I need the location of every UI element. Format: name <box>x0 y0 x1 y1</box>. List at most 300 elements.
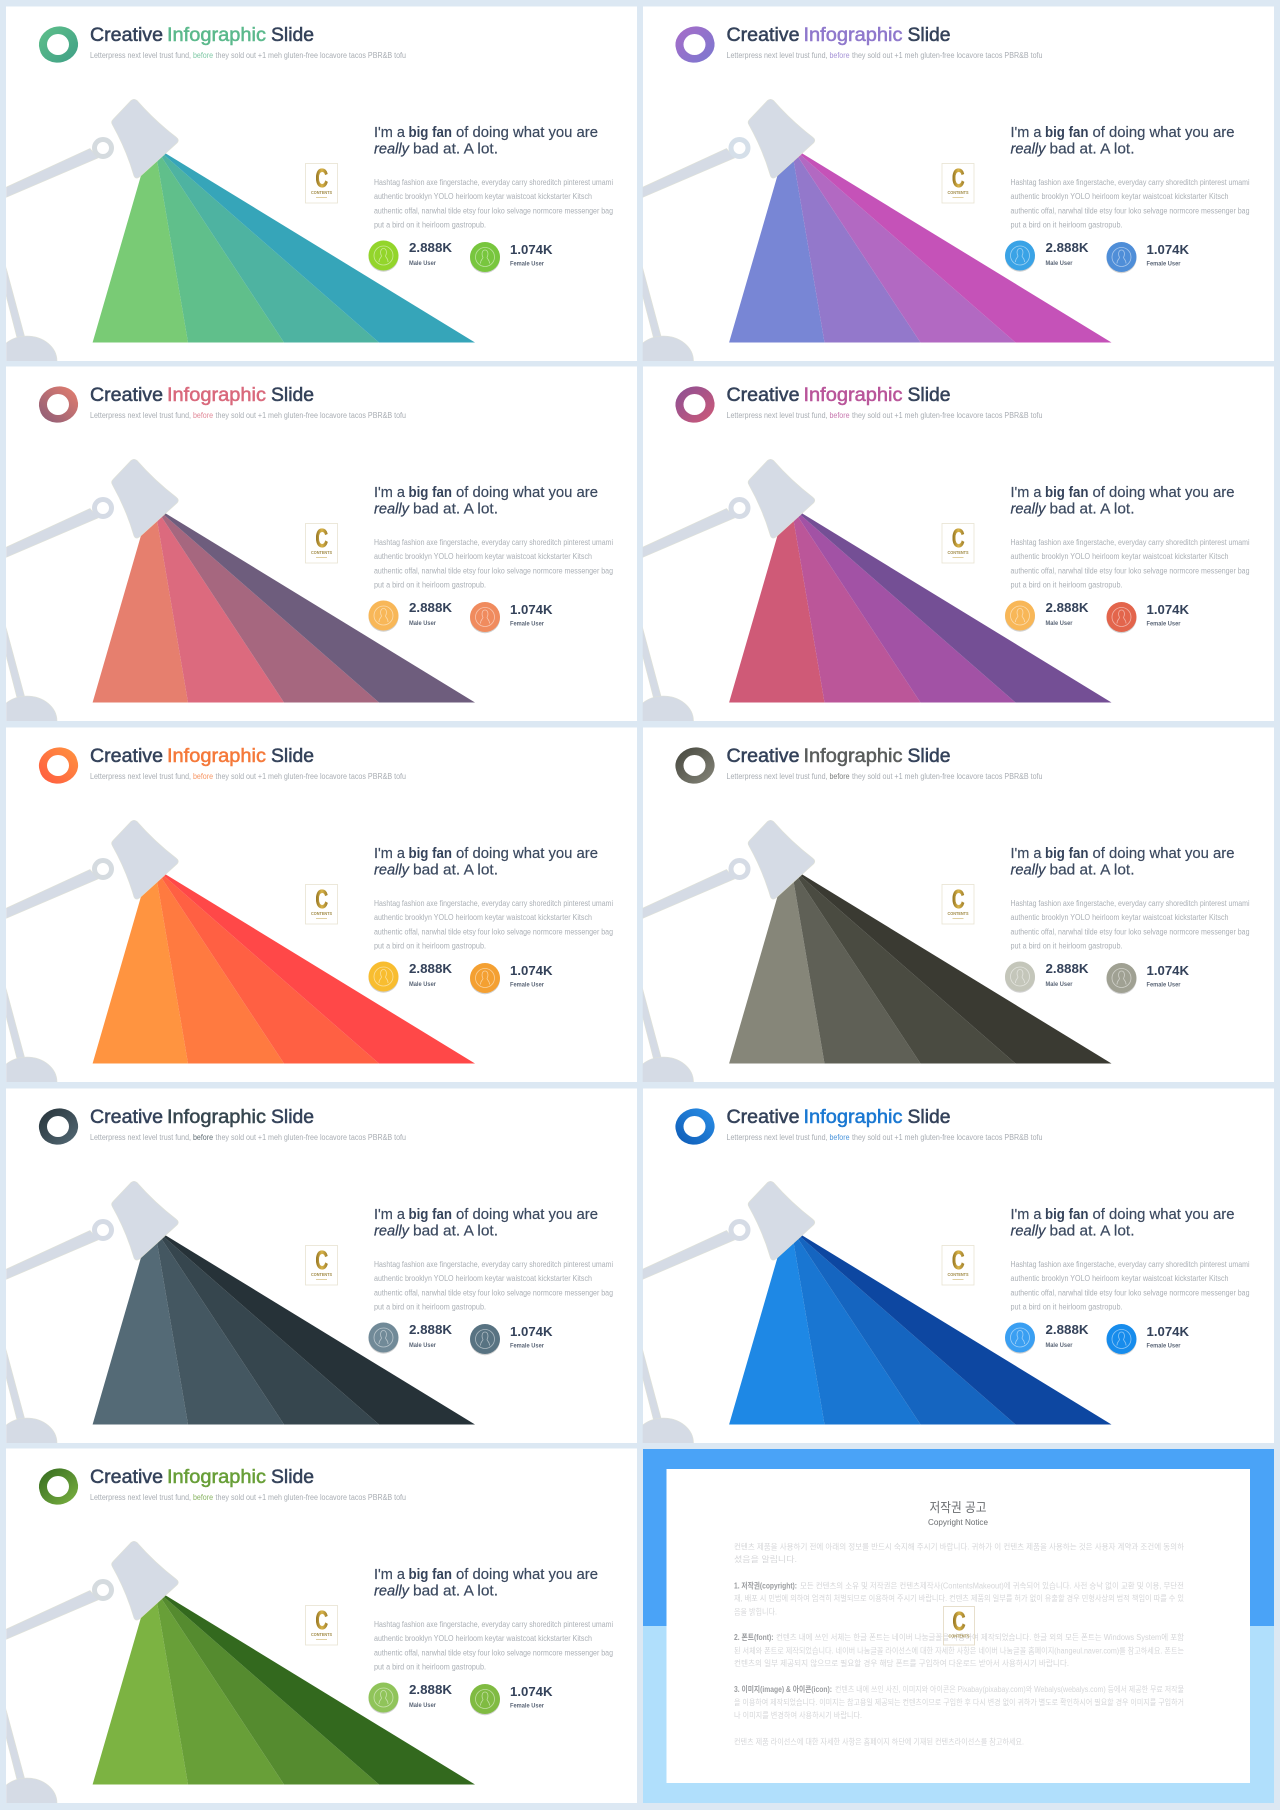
panel: grey slide <box>634 728 1274 1107</box>
stat: male user: 2.888K <box>1046 1323 1088 1337</box>
heading: I'm a <box>1010 484 1042 501</box>
body text: authentic offal, narwhal tilde etsy four loko selvage normcore messenger bag <box>1010 1288 1250 1298</box>
icon: desk lamp <box>6 99 178 361</box>
stat: male user: Male User <box>409 620 436 627</box>
stat: male user <box>1005 240 1088 272</box>
title: Infographic <box>167 746 266 767</box>
body text: Hashtag fashion axe fingerstache, everyday carry shoreditch pinterest umami <box>1010 538 1250 547</box>
subtitle <box>726 1133 1042 1142</box>
stat: female user <box>1106 242 1189 273</box>
title <box>90 1107 314 1128</box>
logo: C <box>316 1245 328 1275</box>
title: Infographic <box>167 1107 266 1128</box>
heading: really <box>374 140 410 158</box>
heading: I'm a <box>374 124 406 141</box>
panel: slate slide <box>0 1088 637 1468</box>
body text: put a bird on it heirloom gastropub. <box>374 942 486 950</box>
heading: big fan <box>408 484 452 501</box>
subtitle: before <box>830 1133 850 1142</box>
body text: authentic offal, narwhal tilde etsy four loko selvage normcore messenger bag <box>374 566 613 576</box>
heading: bad at. A lot. <box>1050 862 1134 878</box>
body text: authentic brooklyn YOLO heirloom keytar waistcoat kickstarter Kitsch <box>1010 552 1228 561</box>
title: Creative <box>90 1107 163 1128</box>
title <box>90 385 314 406</box>
title: Slide <box>908 385 950 406</box>
body text <box>374 538 613 590</box>
subtitle: before <box>193 51 213 60</box>
body text: Hashtag fashion axe fingerstache, everyday carry shoreditch pinterest umami <box>1010 1260 1250 1269</box>
title: Slide <box>271 385 314 406</box>
heading: big fan <box>408 845 452 862</box>
stat: female user: 1.074K <box>510 1685 552 1699</box>
logo: C <box>952 1606 966 1636</box>
stat: male user: Male User <box>1046 620 1073 627</box>
subtitle: they sold out +1 meh gluten-free locavore tacos PBR&B tofu <box>852 411 1042 420</box>
title: Infographic <box>167 385 266 406</box>
body text: authentic brooklyn YOLO heirloom keytar waistcoat kickstarter Kitsch <box>374 192 592 201</box>
heading: big fan <box>1045 484 1088 501</box>
subtitle: they sold out +1 meh gluten-free locavore tacos PBR&B tofu <box>216 1493 406 1502</box>
stat: male user <box>368 1322 452 1354</box>
logo: CONTENTS <box>311 1272 332 1277</box>
stat: male user: Male User <box>409 981 436 988</box>
icon: ring logo <box>39 1108 78 1145</box>
title <box>90 746 314 767</box>
stat: female user: Female User <box>510 982 544 988</box>
heading <box>374 1206 598 1240</box>
stat: male user: 2.888K <box>409 1683 452 1697</box>
body text <box>374 1260 613 1312</box>
copyright body text: 을 이용하여 제작되었습니다. 이미지는 참고용일 제공되는 컨텐츠이므로 구입한 후 다시 변경 없이 귀하가 별도로 확인하시어 필요할 경우 이미지를 구입하거 <box>734 1697 1184 1707</box>
title <box>90 1467 314 1488</box>
heading: of doing what you are <box>456 484 598 501</box>
icon: ring logo <box>675 1108 715 1145</box>
icon: desk lamp <box>0 1541 178 1810</box>
logo <box>942 1245 974 1285</box>
body text <box>374 178 613 230</box>
copyright title: Copyright Notice <box>928 1517 988 1527</box>
subtitle: they sold out +1 meh gluten-free locavore tacos PBR&B tofu <box>852 51 1042 60</box>
title: Creative <box>726 746 800 767</box>
stat: female user: Female User <box>1146 982 1181 988</box>
icon: desk lamp <box>6 820 178 1082</box>
icon: ring logo <box>675 26 715 63</box>
body text: authentic brooklyn YOLO heirloom keytar waistcoat kickstarter Kitsch <box>374 1274 592 1283</box>
heading: I'm a <box>374 1206 406 1223</box>
heading <box>1010 124 1234 158</box>
subtitle: before <box>193 1493 213 1502</box>
stat: male user: 2.888K <box>409 241 452 255</box>
light beam chart <box>729 874 1112 1064</box>
stat: male user <box>1005 962 1088 993</box>
title: Infographic <box>804 1107 902 1128</box>
logo: C <box>316 163 328 193</box>
logo: CONTENTS <box>311 911 332 916</box>
heading: bad at. A lot. <box>413 862 498 878</box>
body text: authentic offal, narwhal tilde etsy four loko selvage normcore messenger bag <box>374 206 613 216</box>
title: Creative <box>90 25 163 46</box>
body text: authentic offal, narwhal tilde etsy four loko selvage normcore messenger bag <box>374 928 613 936</box>
body text: Hashtag fashion axe fingerstache, everyday carry shoreditch pinterest umami <box>1010 899 1250 908</box>
subtitle: before <box>193 411 213 420</box>
stat: female user <box>1106 602 1189 633</box>
logo: C <box>316 884 328 914</box>
icon: desk lamp <box>6 459 178 721</box>
title: Creative <box>726 25 800 46</box>
title: Creative <box>90 385 163 406</box>
subtitle: Letterpress next level trust fund, <box>726 51 828 60</box>
logo <box>942 523 974 563</box>
stat: female user: 1.074K <box>1146 243 1189 257</box>
copyright body text: 컨텐츠 내에 쓰인 사진, 이미지와 아이콘은 Pixabay(pixabay.com)와 Webalys(webalys.com) 등에서 제공한 무료 저작물 <box>835 1684 1184 1694</box>
subtitle: Letterpress next level trust fund, <box>90 1493 191 1502</box>
heading: big fan <box>408 124 452 141</box>
title: Infographic <box>804 385 902 406</box>
subtitle <box>90 772 406 781</box>
light beam chart <box>93 1235 475 1424</box>
logo <box>306 163 338 203</box>
stat: female user: Female User <box>510 1342 544 1350</box>
logo <box>306 523 338 563</box>
copyright body text: 3. 이미지(image) & 아이콘(icon): <box>734 1684 832 1694</box>
title: Slide <box>271 746 314 767</box>
copyright body text <box>734 1542 1185 1746</box>
heading: I'm a <box>1010 845 1042 862</box>
subtitle: they sold out +1 meh gluten-free locavore tacos PBR&B tofu <box>216 1133 406 1142</box>
subtitle: they sold out +1 meh gluten-free locavore tacos PBR&B tofu <box>852 1133 1042 1142</box>
stat: female user: Female User <box>1146 1342 1181 1350</box>
heading <box>1010 484 1234 518</box>
logo <box>306 884 338 924</box>
stat: male user: Male User <box>409 1702 436 1709</box>
subtitle <box>726 411 1042 420</box>
title <box>726 25 950 46</box>
title: Slide <box>271 1107 314 1128</box>
stat: female user <box>1106 1324 1189 1355</box>
light beam chart <box>729 513 1112 702</box>
body text: put a bird on it heirloom gastropub. <box>374 1662 486 1672</box>
subtitle <box>90 51 406 60</box>
heading: really <box>1010 140 1047 158</box>
stat: female user: Female User <box>1146 620 1181 628</box>
stat: male user: 2.888K <box>1046 241 1088 255</box>
heading: of doing what you are <box>456 124 598 141</box>
body text: authentic brooklyn YOLO heirloom keytar waistcoat kickstarter Kitsch <box>1010 1274 1228 1283</box>
heading: big fan <box>1045 124 1088 141</box>
copyright body text: 음을 밝힙니다. <box>734 1606 777 1616</box>
stat: female user: 1.074K <box>1146 603 1189 617</box>
body text: put a bird on it heirloom gastropub. <box>1010 580 1122 590</box>
stat: female user: 1.074K <box>510 603 552 617</box>
stat: female user: 1.074K <box>1146 1325 1189 1339</box>
heading: bad at. A lot. <box>1050 500 1134 518</box>
logo: C <box>316 523 328 553</box>
title <box>726 746 950 767</box>
subtitle <box>726 772 1042 781</box>
stat: male user <box>368 1682 452 1714</box>
stat: female user: 1.074K <box>1146 964 1189 978</box>
stat: male user: 2.888K <box>1046 601 1088 615</box>
copyright title: 저작권 공고 <box>930 1500 987 1515</box>
heading: bad at. A lot. <box>413 1222 498 1240</box>
copyright title <box>928 1500 988 1527</box>
icon: desk lamp <box>642 820 815 1082</box>
stat: female user: Female User <box>510 620 544 628</box>
icon: desk lamp <box>642 99 815 361</box>
heading: big fan <box>408 1566 452 1583</box>
panel: purple slide <box>634 6 1274 386</box>
body text: authentic offal, narwhal tilde etsy four loko selvage normcore messenger bag <box>1010 566 1250 576</box>
title: Slide <box>271 1467 314 1488</box>
copyright body text: 된 서체와 폰트로 제작되었습니다. 네이버 나눔글꼴 라이선스에 대한 자세한 사항은 네이버 나눔글꼴 홈페이지(hangeul.naver.com)를 참고하세요. 폰트는 <box>734 1646 1184 1656</box>
heading <box>1010 1206 1234 1240</box>
heading <box>374 845 598 878</box>
stat: male user <box>368 240 452 272</box>
panel: copyright notice <box>643 1449 1274 1803</box>
stat: male user: Male User <box>1046 1342 1073 1349</box>
light beam chart <box>93 1595 475 1784</box>
panel: green slide <box>0 6 637 386</box>
heading: I'm a <box>374 484 406 501</box>
light beam chart <box>93 874 475 1064</box>
logo <box>942 163 974 203</box>
light beam chart <box>729 1235 1112 1424</box>
heading: bad at. A lot. <box>413 140 498 158</box>
subtitle: Letterpress next level trust fund, <box>726 772 828 781</box>
body text: Hashtag fashion axe fingerstache, everyday carry shoreditch pinterest umami <box>374 1620 613 1629</box>
stat: male user: 2.888K <box>409 962 452 976</box>
subtitle: Letterpress next level trust fund, <box>90 411 191 420</box>
body text: authentic brooklyn YOLO heirloom keytar waistcoat kickstarter Kitsch <box>1010 913 1228 922</box>
light beam chart <box>93 513 475 702</box>
body text: authentic offal, narwhal tilde etsy four loko selvage normcore messenger bag <box>1010 206 1250 216</box>
subtitle <box>726 51 1042 60</box>
copyright body text: 컨텐츠 제품을 사용하기 전에 아래의 정보를 반드시 숙지해 주시기 바랍니다. 귀하가 이 컨텐츠 제품을 사용하는 것은 사용자 계약과 조건에 동의하 <box>734 1542 1185 1552</box>
subtitle: Letterpress next level trust fund, <box>90 772 191 781</box>
stat: female user: Female User <box>510 260 544 268</box>
stat: male user: Male User <box>409 260 436 267</box>
stat: male user <box>1005 600 1088 632</box>
logo: CONTENTS <box>948 1272 968 1277</box>
body text <box>1010 899 1250 950</box>
icon: ring logo <box>39 26 78 63</box>
logo <box>944 1606 974 1645</box>
stat: female user: Female User <box>1146 260 1181 268</box>
logo: C <box>952 163 965 193</box>
copyright body text: 2. 폰트(font): <box>734 1633 774 1642</box>
subtitle <box>90 411 406 420</box>
heading: of doing what you are <box>456 1206 598 1223</box>
stat: male user: 2.888K <box>1046 962 1088 976</box>
stat: male user: Male User <box>409 1342 436 1349</box>
logo: CONTENTS <box>948 550 968 555</box>
heading: big fan <box>1045 1206 1088 1223</box>
heading: really <box>374 1222 410 1240</box>
body text: put a bird on it heirloom gastropub. <box>374 580 486 590</box>
icon: desk lamp <box>642 1181 815 1443</box>
title: Infographic <box>167 25 266 46</box>
title: Slide <box>271 25 314 46</box>
logo: CONTENTS <box>311 1632 332 1637</box>
heading <box>374 124 598 158</box>
stat: female user: 1.074K <box>510 243 552 257</box>
heading <box>374 1566 598 1600</box>
title: Creative <box>726 1107 800 1128</box>
logo: C <box>952 884 965 914</box>
body text: Hashtag fashion axe fingerstache, everyday carry shoreditch pinterest umami <box>1010 178 1250 187</box>
subtitle: before <box>830 51 850 60</box>
logo: C <box>952 523 965 553</box>
heading: of doing what you are <box>1092 124 1234 141</box>
title: Slide <box>908 1107 950 1128</box>
heading: of doing what you are <box>1092 1206 1234 1223</box>
icon: desk lamp <box>642 459 815 721</box>
logo: C <box>952 1245 965 1275</box>
logo <box>942 884 974 924</box>
body text: Hashtag fashion axe fingerstache, everyday carry shoreditch pinterest umami <box>374 178 613 187</box>
stat: female user <box>470 602 552 633</box>
stat: female user <box>470 1324 552 1355</box>
stat: male user <box>368 600 452 632</box>
body text: authentic brooklyn YOLO heirloom keytar waistcoat kickstarter Kitsch <box>374 913 592 922</box>
body text <box>1010 178 1250 230</box>
logo <box>306 1245 338 1285</box>
stat: female user: 1.074K <box>510 964 552 978</box>
body text: authentic brooklyn YOLO heirloom keytar waistcoat kickstarter Kitsch <box>374 1634 592 1643</box>
body text: Hashtag fashion axe fingerstache, everyday carry shoreditch pinterest umami <box>374 1260 613 1269</box>
heading <box>1010 845 1234 878</box>
heading: really <box>1010 500 1047 518</box>
stat: male user: 2.888K <box>409 601 452 615</box>
heading: I'm a <box>1010 124 1042 141</box>
stat: male user <box>1005 1322 1088 1354</box>
body text: put a bird on it heirloom gastropub. <box>374 220 486 230</box>
title: Infographic <box>167 1467 266 1488</box>
stat: male user: Male User <box>1046 981 1073 988</box>
heading: I'm a <box>374 1566 406 1583</box>
copyright body text: 컨텐츠 내에 쓰인 서체는 한글 폰트는 네이버 나눔글꼴을 사용하여 제작되었습니다. 한글 외의 모든 폰트는 Windows System에 포함 <box>776 1632 1185 1642</box>
stat: male user: Male User <box>1046 260 1073 267</box>
title: Creative <box>90 1467 163 1488</box>
heading: really <box>1010 862 1047 878</box>
title: Slide <box>908 25 950 46</box>
subtitle: they sold out +1 meh gluten-free locavore tacos PBR&B tofu <box>852 772 1042 781</box>
icon: ring logo <box>39 1468 78 1505</box>
subtitle: Letterpress next level trust fund, <box>90 1133 191 1142</box>
panel: blue slide <box>634 1088 1274 1468</box>
heading: I'm a <box>1010 1206 1042 1223</box>
body text: put a bird on it heirloom gastropub. <box>1010 220 1122 230</box>
icon: ring logo <box>675 386 715 423</box>
icon: ring logo <box>39 747 78 784</box>
logo: CONTENTS <box>948 1634 970 1638</box>
icon: desk lamp <box>6 1181 178 1443</box>
copyright body text: 모든 컨텐츠의 소유 및 저작권은 컨텐츠제작사(ContentsMakeout)에 귀속되어 있습니다. 사전 승낙 없이 교환 및 이용, 무단전 <box>800 1580 1184 1590</box>
subtitle: Letterpress next level trust fund, <box>726 411 828 420</box>
heading: really <box>374 862 410 878</box>
subtitle: they sold out +1 meh gluten-free locavore tacos PBR&B tofu <box>216 51 406 60</box>
panel: dark green slide <box>0 1448 637 1810</box>
title: Infographic <box>804 25 902 46</box>
heading: of doing what you are <box>1092 484 1234 501</box>
panel: magenta slide <box>634 366 1274 746</box>
stat: female user <box>470 1684 552 1715</box>
heading: big fan <box>408 1206 452 1223</box>
body text: Hashtag fashion axe fingerstache, everyday carry shoreditch pinterest umami <box>374 899 613 908</box>
body text <box>1010 538 1250 590</box>
logo: CONTENTS <box>948 190 968 195</box>
body text: Hashtag fashion axe fingerstache, everyday carry shoreditch pinterest umami <box>374 538 613 547</box>
subtitle: before <box>830 411 850 420</box>
heading: of doing what you are <box>456 845 598 862</box>
heading: really <box>374 500 410 518</box>
copyright body text: 컨텐츠의 일부 제공되지 않으므로 필요할 경우 해당 폰트를 구입하여 다운로드 받아서 사용하시기 바랍니다. <box>734 1658 1069 1668</box>
heading: I'm a <box>374 845 406 862</box>
title: Slide <box>908 746 950 767</box>
subtitle: before <box>830 772 850 781</box>
heading: of doing what you are <box>1092 845 1234 862</box>
panel: coral slide <box>0 366 637 746</box>
stat: female user: Female User <box>510 1702 544 1710</box>
heading: bad at. A lot. <box>1050 1222 1134 1240</box>
copyright body text: 컨텐츠 제품 라이선스에 대한 자세한 사항은 홈페이지 하단에 기재된 컨텐츠라이선스를 참고하세요. <box>734 1736 1024 1746</box>
title: Creative <box>90 746 163 767</box>
subtitle: Letterpress next level trust fund, <box>726 1133 828 1142</box>
heading: really <box>1010 1222 1047 1240</box>
heading: bad at. A lot. <box>413 500 498 518</box>
title <box>726 385 950 406</box>
body text: authentic brooklyn YOLO heirloom keytar waistcoat kickstarter Kitsch <box>1010 192 1228 201</box>
stat: male user: 2.888K <box>409 1323 452 1337</box>
stat: female user: 1.074K <box>510 1325 552 1339</box>
subtitle <box>90 1133 406 1142</box>
stat: female user <box>470 963 552 994</box>
body text: put a bird on it heirloom gastropub. <box>1010 942 1122 950</box>
copyright body text: 1. 저작권(copyright): <box>734 1580 797 1590</box>
stat: male user <box>368 962 452 993</box>
heading: big fan <box>1045 845 1088 862</box>
title <box>90 25 314 46</box>
heading: bad at. A lot. <box>1050 140 1134 158</box>
panel: orange slide <box>0 728 637 1107</box>
body text: authentic offal, narwhal tilde etsy four loko selvage normcore messenger bag <box>374 1288 613 1298</box>
body text <box>1010 1260 1250 1312</box>
heading: bad at. A lot. <box>413 1582 498 1600</box>
title: Creative <box>726 385 800 406</box>
subtitle: they sold out +1 meh gluten-free locavore tacos PBR&B tofu <box>216 772 406 781</box>
body text <box>374 899 613 950</box>
icon: ring logo <box>39 386 78 423</box>
logo: CONTENTS <box>311 550 332 555</box>
subtitle <box>90 1493 406 1502</box>
heading: really <box>374 1582 410 1600</box>
light beam chart <box>729 153 1112 342</box>
subtitle: before <box>193 1133 213 1142</box>
logo <box>306 1605 338 1645</box>
light beam chart <box>93 153 475 342</box>
stat: female user <box>470 242 552 273</box>
title <box>726 1107 950 1128</box>
heading <box>374 484 598 518</box>
body text: authentic offal, narwhal tilde etsy four loko selvage normcore messenger bag <box>1010 928 1250 936</box>
title: Infographic <box>804 746 902 767</box>
subtitle: before <box>193 772 213 781</box>
subtitle: they sold out +1 meh gluten-free locavore tacos PBR&B tofu <box>216 411 406 420</box>
body text <box>374 1620 613 1672</box>
body text: put a bird on it heirloom gastropub. <box>1010 1302 1122 1312</box>
logo: CONTENTS <box>948 911 968 916</box>
body text: put a bird on it heirloom gastropub. <box>374 1302 486 1312</box>
